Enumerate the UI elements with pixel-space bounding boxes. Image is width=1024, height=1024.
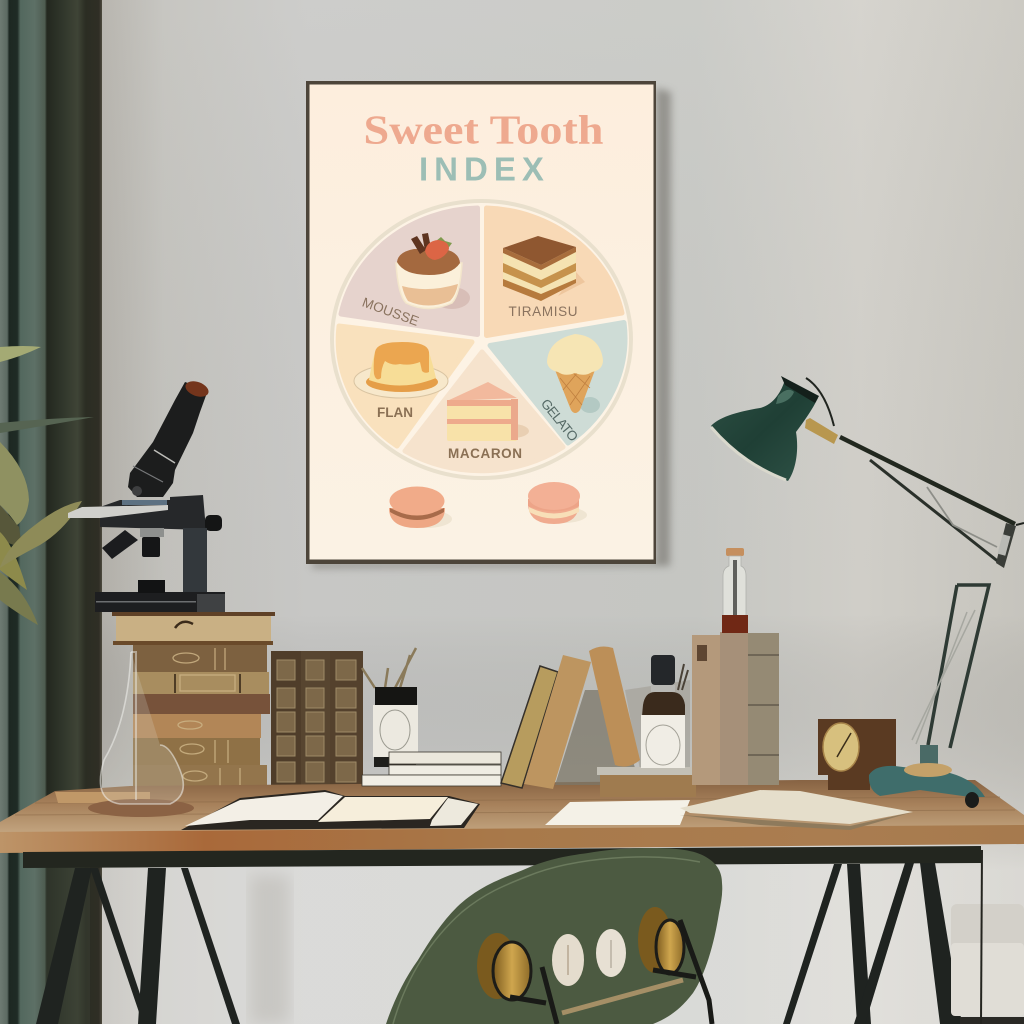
segment: mousse [341,208,478,334]
segment: flan [338,326,472,446]
lamp shade [711,376,819,481]
plant leaves [0,346,94,625]
lamp cable [806,378,834,426]
leaning books [501,647,690,789]
chair back [386,848,722,1024]
dessert: mousse cup [396,233,470,309]
lamp [711,376,1024,568]
objectives [102,530,138,559]
open book left [181,790,480,830]
segment: tiramisu [486,208,622,336]
lamp cable to floor [981,850,982,1024]
segment: macaron [405,352,563,471]
spine ornaments [173,648,240,788]
macaron: chocolate filling [389,486,452,528]
tall glass bottle [722,548,748,633]
small white books [362,752,501,786]
stand pivot [920,745,938,767]
poster shadow [312,88,671,568]
bottle with label [641,655,688,768]
open book right [545,790,913,830]
stand frame [928,585,989,748]
microscope base [95,592,225,612]
poster [306,81,671,568]
small book with grey cover [597,767,696,797]
right trestle legs [783,863,962,1024]
focus knob [205,515,222,531]
stacked spines [133,645,267,672]
left trestle legs [36,868,240,1024]
brass gauge right [638,907,684,974]
wood board [55,792,150,803]
macaron: cream filling [528,482,587,524]
lamp base wheel [965,792,979,808]
dessert: gelato cone [547,334,603,413]
lamp brass joint [805,418,838,444]
coaster [88,799,194,817]
chair bracket [510,920,712,1024]
dial [552,934,584,986]
eyepiece tube [128,382,208,497]
dessert: tiramisu [503,236,585,301]
dial [596,929,626,977]
pillar [183,528,207,594]
book stack [112,612,275,790]
desk [0,780,1024,1024]
lamp stand [869,585,989,808]
curtain [0,0,102,1024]
glass vase [55,652,194,817]
poster title: Sweet Tooth [364,106,604,152]
radiator [951,904,1024,1024]
desk surface [0,780,1024,833]
lamp arm [840,437,1024,568]
poster frame [306,81,656,564]
dessert: macaron cake slice [447,382,529,441]
segment: gelato [490,322,625,443]
brass gauge left [477,933,531,1000]
pie outer ring [332,201,631,478]
label: macaron: MACARON [448,446,522,461]
tall tan books [692,632,779,785]
dessert: flan [354,342,448,398]
label: flan: FLAN [377,405,413,420]
cake body [503,247,576,300]
desk rail [23,846,981,868]
vase body [100,652,183,804]
label: tiramisu: TIRAMISU [508,304,578,319]
microscope [68,378,225,612]
lamp base [869,766,985,797]
stage [100,495,206,530]
pie chart [332,201,631,478]
poster subtitle: INDEX [419,150,550,188]
upright antique books [271,651,363,788]
label: gelato: GELATO [538,396,581,444]
poster paper [310,84,654,560]
desk plank lines [15,797,1015,815]
desk clock [818,719,896,790]
desk front face [0,825,1024,853]
pen cup [362,648,418,767]
top book [112,612,275,645]
label: mousse: MOUSSE [360,295,421,329]
chair [386,848,722,1024]
